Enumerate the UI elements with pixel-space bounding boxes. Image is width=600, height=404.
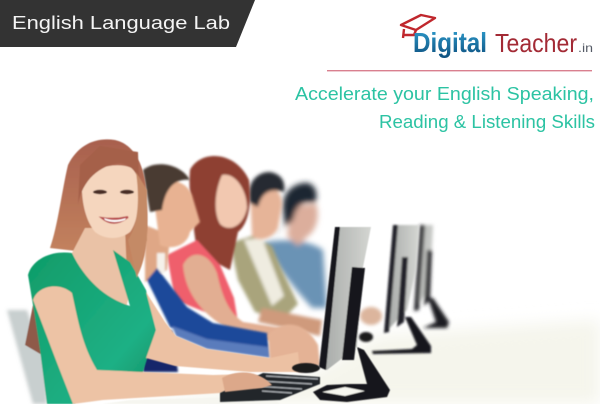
blurred back student: denim [263,183,327,308]
keyboard [220,373,320,402]
logo: Digital Teacher: .in [578,41,593,55]
icon: graduation cap [401,15,435,38]
front monitor [313,227,390,402]
hands on keyboard [268,325,320,372]
desk edge strip [102,396,280,404]
divider line [327,70,592,71]
logo: Digital Teacher: Digital [413,27,487,58]
logo: Digital Teacher: Teacher [495,28,577,58]
tagline [295,83,595,132]
logo: Digital Teacher [401,15,593,58]
front woman [7,139,300,404]
far monitor [414,225,449,328]
photo: students at computers [7,139,600,404]
icon: eyes and smile [93,190,134,223]
mouse: far [359,332,373,342]
hair right strand [128,172,147,278]
hair back [50,139,148,278]
blurred student: patterned shirt [230,172,322,336]
tagline: Accelerate your English Speaking, [295,83,594,104]
middle monitor [372,225,431,354]
title banner: English Language Lab [12,13,230,33]
face [82,165,139,238]
hand on keyboard [222,372,272,392]
arm near [33,286,272,404]
tagline: Reading & Listening Skills [379,111,595,132]
title banner [0,0,255,47]
student: woman in coral top [167,156,296,342]
arm far [146,292,300,372]
green shirt [28,250,156,404]
chair [7,310,47,404]
hair fringe [78,146,139,205]
mouse: dark [292,363,320,373]
student: man with blue sleeve [143,164,270,372]
chest and neck [72,228,128,308]
hand: blurred far student [360,307,382,325]
desk [120,320,600,404]
